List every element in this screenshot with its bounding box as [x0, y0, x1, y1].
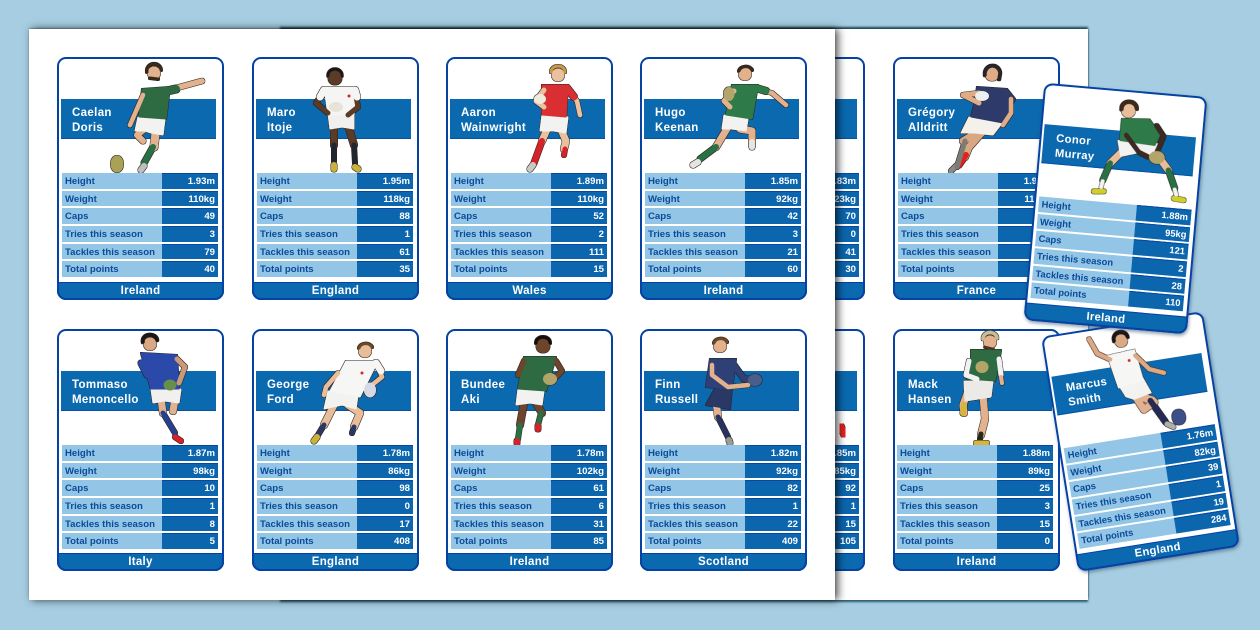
player: Doris: [110, 62, 206, 173]
name banner: George: [267, 379, 309, 391]
stats table: 6: [599, 501, 604, 512]
stats table: Tackles this season: [1035, 269, 1123, 287]
card: Finn Russell: [640, 329, 807, 571]
team footer: Ireland: [704, 285, 743, 297]
stats table: 1.82m: [771, 448, 798, 459]
team footer: [1023, 302, 1188, 334]
stats table: 19: [1212, 496, 1224, 508]
card: Maro Itoje: [252, 57, 419, 300]
player: Itoje: [312, 67, 362, 172]
stats table: Total points: [260, 536, 314, 547]
stats table: Tackles this season: [648, 519, 738, 530]
stats table: [62, 173, 218, 277]
stats table: 10: [204, 483, 215, 494]
stats table: 1.93m: [1024, 176, 1051, 187]
stats table: Total points: [65, 264, 119, 275]
stats table: Caps: [1038, 234, 1061, 247]
stats table: Tries this season: [901, 229, 979, 240]
stats table: 1.78m: [577, 448, 604, 459]
stats table: 112kg: [1024, 194, 1051, 205]
stats table: 111: [589, 247, 604, 258]
name banner: Russell: [655, 394, 698, 406]
stats table: Weight: [648, 466, 680, 477]
team footer: Scotland: [698, 556, 749, 568]
stats table: 79: [204, 247, 215, 258]
name banner: Grégory: [908, 107, 955, 119]
card: Caelan Doris: [57, 57, 224, 300]
team footer: Ireland: [957, 556, 996, 568]
card: Hugo Keenan: [640, 57, 807, 300]
name banner: [61, 99, 216, 139]
stats table: Total points: [648, 264, 702, 275]
name banner: Hansen: [908, 394, 952, 406]
stats table: Total points: [901, 264, 955, 275]
stats table: [829, 173, 859, 277]
name banner: [256, 99, 411, 139]
stats table: 1.88m: [1023, 448, 1050, 459]
stats table: Tackles this season: [454, 247, 544, 258]
team footer: [446, 553, 613, 571]
stats table: 1.85m: [771, 176, 798, 187]
player: Ford: [310, 342, 385, 444]
stats table: [645, 445, 801, 549]
stats table: 0: [851, 229, 856, 240]
stats table: Tries this season: [65, 501, 143, 512]
team footer: [698, 553, 865, 571]
stats table: 2: [599, 229, 604, 240]
stats table: Weight: [648, 194, 680, 205]
stats table: Weight: [901, 194, 933, 205]
back sheet: [280, 29, 1088, 600]
stats table: Weight: [1069, 462, 1102, 478]
name banner: Maro: [267, 107, 296, 119]
name banner: Tommaso: [72, 379, 128, 391]
stats table: Tries this season: [1036, 251, 1113, 269]
stats table: 1.89m: [577, 176, 604, 187]
card: Grégory Alldritt: [893, 57, 1060, 300]
stats table: 25: [1039, 483, 1050, 494]
stats table: [451, 445, 607, 549]
stats table: Tries this season: [648, 229, 726, 240]
stats table: 15: [593, 264, 604, 275]
stats table: [897, 445, 1053, 549]
name banner: Murray: [1054, 148, 1094, 163]
card: Aaron Wainwright: [446, 57, 613, 300]
stats table: Tries this season: [454, 229, 532, 240]
stats table: Total points: [454, 536, 508, 547]
stats table: 1: [851, 501, 856, 512]
team footer: [446, 282, 613, 300]
name banner: [897, 371, 1052, 411]
stats table: [257, 173, 413, 277]
stats table: Tries this season: [260, 501, 338, 512]
stats table: Height: [454, 448, 484, 459]
name banner: [61, 371, 216, 411]
stats table: 30: [845, 264, 856, 275]
stats table: Weight: [260, 194, 292, 205]
stats table: 61: [399, 247, 410, 258]
name banner: Smith: [1067, 391, 1101, 408]
stats table: Tackles this season: [901, 247, 991, 258]
card: Tommaso Menoncello: [57, 329, 224, 571]
icon: red boot: [840, 424, 846, 438]
card: partly hidden player, top row: [698, 57, 865, 300]
stats table: 82kg: [1193, 444, 1216, 458]
stats table: 31: [593, 519, 604, 530]
stats table: 3: [210, 229, 215, 240]
stats table: Tries this season: [648, 501, 726, 512]
team footer: [640, 282, 807, 300]
team footer: [893, 553, 1060, 571]
stats table: 1.85m: [829, 448, 856, 459]
name banner: Aaron: [461, 107, 496, 119]
stats table: 123kg: [829, 194, 856, 205]
stats table: Total points: [900, 536, 954, 547]
stats table: 1.87m: [188, 448, 215, 459]
stats table: Caps: [454, 483, 477, 494]
stats table: Tackles this season: [260, 519, 350, 530]
stats table: 60: [787, 264, 798, 275]
stats table: Tackles this season: [454, 519, 544, 530]
card: Conor Murray (tilted): [1023, 83, 1207, 334]
stats table: [62, 445, 218, 549]
stats table: [898, 173, 1051, 277]
stats table: Tries this season: [1075, 490, 1152, 512]
stats table: Total points: [1080, 528, 1134, 546]
name banner: Doris: [72, 122, 103, 134]
stats table: 70: [845, 211, 856, 222]
name banner: [644, 99, 799, 139]
stats table: 22: [787, 519, 798, 530]
stats table: 61: [593, 483, 604, 494]
stats table: Caps: [901, 211, 924, 222]
card: George Ford: [252, 329, 419, 571]
player: Murray: [1090, 99, 1187, 204]
stats table: Height: [1041, 200, 1071, 213]
stats table: 15: [845, 519, 856, 530]
name banner: Caelan: [72, 107, 112, 119]
stats table: Weight: [260, 466, 292, 477]
stats table: 42: [787, 211, 798, 222]
team footer: [252, 553, 419, 571]
stats table: Tackles this season: [648, 247, 738, 258]
stats table: [829, 445, 859, 549]
stats table: 1.95m: [383, 176, 410, 187]
stats table: 28: [1171, 281, 1182, 292]
stats table: Height: [648, 176, 678, 187]
stats table: 82: [787, 483, 798, 494]
stats table: 1.88m: [1160, 210, 1188, 223]
name banner: Wainwright: [461, 122, 526, 134]
stats table: 86kg: [388, 466, 410, 477]
name banner: Finn: [655, 379, 681, 391]
stats table: 1: [793, 501, 798, 512]
name banner: [702, 371, 857, 411]
stats table: 52: [593, 211, 604, 222]
team footer: Ireland: [1085, 311, 1125, 326]
stats table: 0: [405, 501, 410, 512]
stats table: 98kg: [193, 466, 215, 477]
stats table: 1.78m: [383, 448, 410, 459]
stats table: Total points: [454, 264, 508, 275]
stats table: Caps: [260, 483, 283, 494]
name banner: Ford: [267, 394, 294, 406]
stats table: Weight: [900, 466, 932, 477]
team footer: England: [1133, 540, 1181, 559]
name banner: Marcus: [1065, 375, 1108, 394]
stats table: 110kg: [188, 194, 215, 205]
stats table: Height: [65, 176, 95, 187]
player: Aki: [514, 335, 566, 445]
stats table: Tries this season: [65, 229, 143, 240]
team footer: [698, 282, 865, 300]
name banner: [702, 99, 857, 139]
stats table: 98: [399, 483, 410, 494]
card: partly hidden player, bottom row: [698, 329, 865, 571]
name banner: [450, 99, 605, 139]
name banner: [450, 371, 605, 411]
stats table: 39: [1207, 461, 1219, 474]
name banner: Aki: [461, 394, 480, 406]
stats table: Weight: [65, 466, 97, 477]
stats table: 35: [399, 264, 410, 275]
name banner: Itoje: [267, 122, 292, 134]
stats table: Tries this season: [260, 229, 338, 240]
stats table: Tackles this season: [900, 519, 990, 530]
stats table: 3: [793, 229, 798, 240]
stats table: 41: [845, 247, 856, 258]
stats table: 118kg: [383, 194, 410, 205]
stats table: Height: [1067, 446, 1097, 461]
stats table: 95kg: [1164, 228, 1186, 240]
stats table: Height: [260, 176, 290, 187]
stats table: 1: [405, 229, 410, 240]
stats table: 40: [204, 264, 215, 275]
stats table: 3: [1045, 501, 1050, 512]
stats table: Tries this season: [900, 501, 978, 512]
name banner: [256, 371, 411, 411]
player: Russell: [705, 336, 762, 445]
stats table: 1: [1215, 479, 1222, 490]
stats table: Caps: [454, 211, 477, 222]
player: Alldritt: [948, 64, 1016, 173]
stats table: 17: [399, 519, 410, 530]
stats table: 105: [840, 536, 856, 547]
stats table: Caps: [65, 211, 88, 222]
stats table: Height: [65, 448, 95, 459]
team footer: [1075, 528, 1239, 571]
card: Marcus Smith (tilted): [1041, 311, 1239, 571]
card: Mack Hansen: [893, 329, 1060, 571]
name banner: [1051, 352, 1207, 415]
name banner: Bundee: [461, 379, 505, 391]
stats table: Total points: [1033, 286, 1086, 301]
stats table: 92: [845, 483, 856, 494]
stats table: 1.76m: [1185, 427, 1213, 442]
player: Hansen: [959, 330, 1004, 445]
stats table: 21: [787, 247, 798, 258]
stats table: [257, 445, 413, 549]
stats table: Tries this season: [454, 501, 532, 512]
stats table: Total points: [260, 264, 314, 275]
player: Menoncello: [138, 332, 188, 444]
stats table: 1.93m: [188, 176, 215, 187]
stats table: 89kg: [1028, 466, 1050, 477]
stats table: 85kg: [834, 466, 856, 477]
stats table: Height: [901, 176, 931, 187]
stats table: [645, 173, 801, 277]
player: Wainwright: [526, 64, 583, 172]
stats table: 409: [782, 536, 798, 547]
name banner: Alldritt: [908, 122, 948, 134]
stats table: 1.83m: [829, 176, 856, 187]
team footer: Italy: [128, 556, 153, 568]
stats table: 49: [204, 211, 215, 222]
front sheet: [29, 29, 835, 600]
stats table: Tackles this season: [65, 519, 155, 530]
stats table: Height: [648, 448, 678, 459]
name banner: [897, 99, 1052, 139]
stats table: 15: [1039, 519, 1050, 530]
stats table: Tackles this season: [65, 247, 155, 258]
team footer: [893, 282, 1060, 300]
stats table: Total points: [648, 536, 702, 547]
stats table: 8: [210, 519, 215, 530]
stats table: Total points: [65, 536, 119, 547]
stats table: 85: [593, 536, 604, 547]
name banner: Hugo: [655, 107, 686, 119]
stats table: Height: [260, 448, 290, 459]
stats table: 284: [1210, 513, 1227, 526]
stats table: 110kg: [577, 194, 604, 205]
stats table: 0: [1045, 536, 1050, 547]
stats table: Weight: [454, 466, 486, 477]
team footer: Wales: [512, 285, 547, 297]
stats table: Weight: [454, 194, 486, 205]
stats table: Caps: [1072, 481, 1096, 495]
stats table: 121: [1168, 246, 1185, 258]
stats table: Caps: [260, 211, 283, 222]
team footer: Ireland: [510, 556, 549, 568]
team footer: England: [312, 285, 359, 297]
team footer: [57, 553, 224, 571]
stats table: 92kg: [776, 466, 798, 477]
team footer: England: [312, 556, 359, 568]
team footer: [640, 553, 807, 571]
stats table: 2: [1177, 264, 1183, 275]
name banner: [1041, 124, 1195, 176]
name banner: [644, 371, 799, 411]
stats table: Caps: [648, 483, 671, 494]
stats table: 1: [210, 501, 215, 512]
stats table: Tackles this season: [260, 247, 350, 258]
stats table: 408: [394, 536, 410, 547]
team footer: Ireland: [121, 285, 160, 297]
stats table: Caps: [900, 483, 923, 494]
stats table: 5: [210, 536, 215, 547]
stats table: 102kg: [577, 466, 604, 477]
stats table: Caps: [648, 211, 671, 222]
stats table: 92kg: [776, 194, 798, 205]
stats table: 88: [399, 211, 410, 222]
stats table: Tackles this season: [1077, 505, 1166, 529]
card: Bundee Aki: [446, 329, 613, 571]
stats table: 110: [1164, 297, 1180, 310]
name banner: Mack: [908, 379, 938, 391]
stats table: [1030, 196, 1192, 312]
team footer: [57, 282, 224, 300]
stats table: Height: [900, 448, 930, 459]
stats table: Height: [454, 176, 484, 187]
name banner: Menoncello: [72, 394, 139, 406]
player: Keenan: [690, 64, 789, 168]
name banner: Conor: [1055, 133, 1091, 148]
stats table: Weight: [65, 194, 97, 205]
team footer: France: [957, 285, 996, 297]
stats table: Weight: [1039, 217, 1071, 230]
stats table: [1064, 424, 1231, 549]
stats table: [451, 173, 607, 277]
team footer: [252, 282, 419, 300]
name banner: Keenan: [655, 122, 699, 134]
stats table: Caps: [65, 483, 88, 494]
player: Smith: [1086, 329, 1187, 430]
